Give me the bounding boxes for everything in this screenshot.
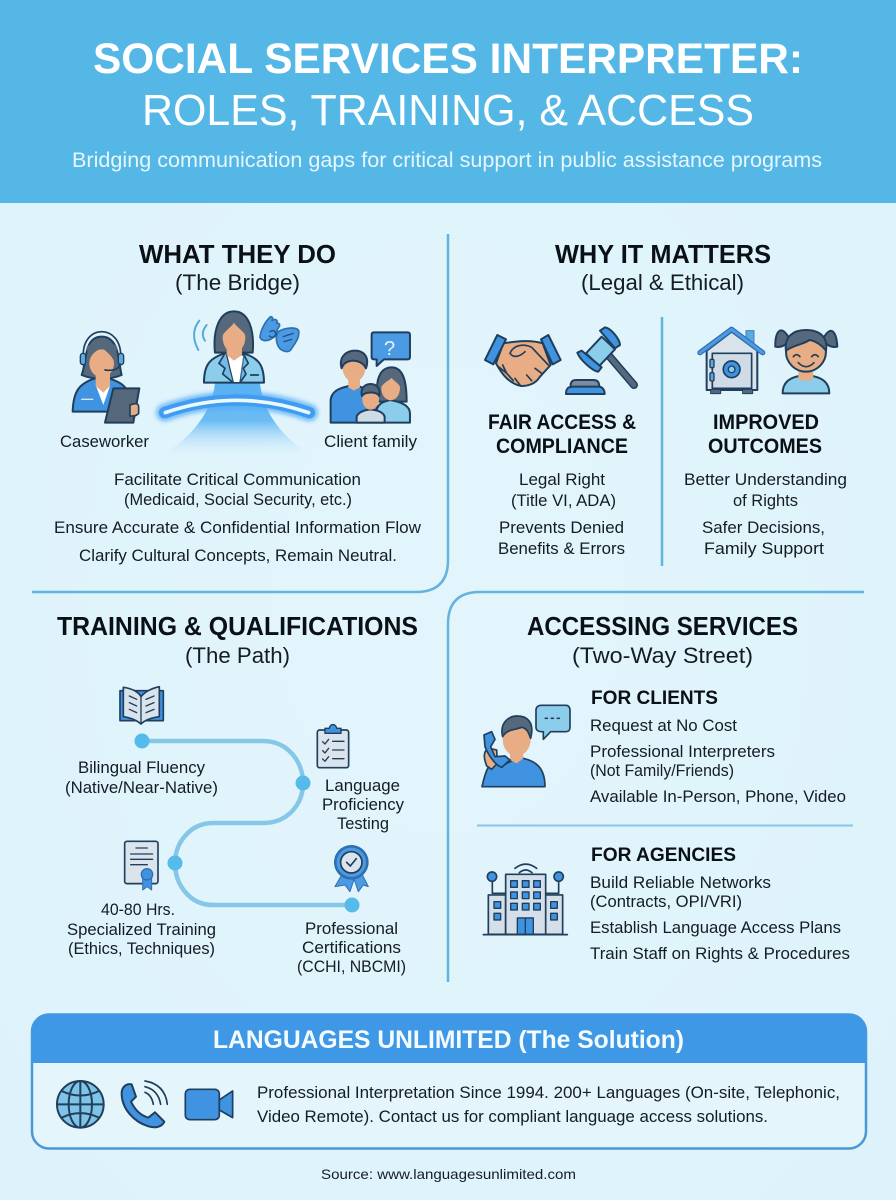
icon: video camera [185, 1089, 233, 1120]
title: ROLES, TRAINING, & ACCESS [142, 86, 754, 135]
text block: fair access: COMPLIANCE [496, 435, 628, 458]
text block: improved outcomes [684, 411, 847, 558]
milestone labels: (Native/Near-Native) [65, 778, 218, 797]
text block: fair access [488, 411, 636, 558]
heading: what they do [139, 239, 336, 295]
icon: phone with signal [122, 1081, 167, 1127]
banner heading: LANGUAGES UNLIMITED (The Solution) [213, 1026, 684, 1054]
icon: client family [331, 332, 410, 423]
text block: improved outcomes: OUTCOMES [708, 435, 822, 458]
text block: for clients: (Not Family/Friends) [590, 761, 734, 780]
text block: for clients: FOR CLIENTS [591, 688, 718, 709]
banner text: Video Remote). Contact us for compliant language access solutions. [257, 1107, 768, 1126]
heading: training: (The Path) [185, 643, 290, 668]
text block: improved outcomes: of Rights [733, 491, 798, 510]
icon: clipboard [317, 725, 349, 768]
text block: fair access: Legal Right [519, 470, 605, 489]
text block: for agencies: (Contracts, OPI/VRI) [590, 892, 742, 911]
heading: why it matters: (Legal & Ethical) [581, 270, 744, 295]
heading: training [57, 611, 418, 668]
banner text: Professional Interpretation Since 1994. 200+ Languages (On-site, Telephonic, [257, 1083, 840, 1102]
text block: improved outcomes: IMPROVED [713, 411, 819, 434]
subtitle: Bridging communication gaps for critical support in public assistance programs [72, 149, 822, 172]
icon: globe [57, 1081, 104, 1128]
icon: bridge illustration [73, 311, 410, 458]
text block: for clients [590, 688, 846, 806]
icon: certificate document [125, 841, 158, 890]
heading: why it matters [555, 239, 771, 295]
milestone labels: 40-80 Hrs. [101, 900, 175, 919]
icon: award rosette [335, 846, 368, 892]
icon: house with safe [700, 329, 763, 394]
milestone labels: (CCHI, NBCMI) [297, 957, 406, 976]
header banner [0, 0, 896, 203]
heading: accessing services [527, 611, 798, 668]
text block: improved outcomes: Safer Decisions, [702, 518, 825, 537]
text block: duties: Clarify Cultural Concepts, Remain Neutral. [79, 546, 397, 565]
panel: languages unlimited [32, 1014, 866, 1148]
heading: why it matters: WHY IT MATTERS [555, 239, 771, 269]
text block: fair access: Benefits & Errors [498, 539, 625, 558]
text block: duties: (Medicaid, Social Security, etc.) [124, 490, 352, 509]
heading: what they do: (The Bridge) [175, 270, 300, 295]
heading: training: TRAINING & QUALIFICATIONS [57, 611, 418, 641]
text block: duties [54, 470, 422, 565]
text block: for clients: Professional Interpreters [590, 742, 775, 761]
icon: interpreter [194, 311, 299, 383]
text block: fair access: FAIR ACCESS & [488, 411, 636, 434]
milestone labels: Specialized Training [67, 920, 216, 939]
icon: client on phone [482, 705, 570, 787]
text block: improved outcomes: Family Support [704, 539, 824, 558]
milestone labels: Professional [305, 919, 398, 938]
text block: duties: Ensure Accurate & Confidential Information Flow [54, 518, 422, 537]
icon: smiling child [775, 330, 837, 393]
text block: fair access: Prevents Denied [499, 518, 624, 537]
milestone labels: Language [325, 776, 400, 795]
icon: client family: ? [384, 338, 395, 360]
panel: why it matters [485, 239, 847, 566]
banner heading [32, 1014, 866, 1063]
path line with milestones [134, 734, 360, 912]
text block: for clients: Available In-Person, Phone, Video [590, 787, 846, 806]
panel: training and qualifications [57, 611, 418, 976]
labels: caseworker and client family: Caseworker [60, 432, 149, 451]
icon: open book [120, 687, 163, 724]
milestone labels: (Ethics, Techniques) [68, 939, 215, 958]
text block: for agencies: Train Staff on Rights & Procedures [590, 944, 850, 963]
text block: fair access: (Title VI, ADA) [511, 491, 616, 510]
milestone labels: Certifications [302, 938, 401, 957]
icon: caseworker [73, 332, 139, 423]
labels: caseworker and client family: Client family [324, 432, 417, 451]
panel: accessing services [477, 611, 853, 963]
heading: accessing services: (Two-Way Street) [572, 643, 753, 668]
milestone labels: Testing [337, 814, 389, 833]
milestone labels [65, 758, 406, 976]
panel: what they do [54, 239, 422, 565]
milestone labels: Bilingual Fluency [78, 758, 205, 777]
text block: duties: Facilitate Critical Communication [114, 470, 361, 489]
source line: Source: www.languagesunlimited.com [321, 1166, 576, 1182]
text block: for agencies [590, 845, 850, 963]
text block: for clients: Request at No Cost [590, 716, 737, 735]
text block: improved outcomes: Better Understanding [684, 470, 847, 489]
milestone labels: Proficiency [322, 795, 404, 814]
text block: for agencies: Build Reliable Networks [590, 873, 771, 892]
heading: what they do: WHAT THEY DO [139, 239, 336, 269]
heading: accessing services: ACCESSING SERVICES [527, 611, 798, 641]
text block: for agencies: FOR AGENCIES [591, 845, 736, 866]
title [93, 35, 803, 135]
banner text [257, 1083, 840, 1126]
icon: gavel [566, 327, 634, 394]
icon: agency building [483, 864, 567, 935]
labels: caseworker and client family [60, 432, 417, 451]
title: SOCIAL SERVICES INTERPRETER: [93, 35, 803, 83]
text block: for agencies: Establish Language Access Plans [590, 918, 841, 937]
icon: handshake [485, 335, 561, 386]
